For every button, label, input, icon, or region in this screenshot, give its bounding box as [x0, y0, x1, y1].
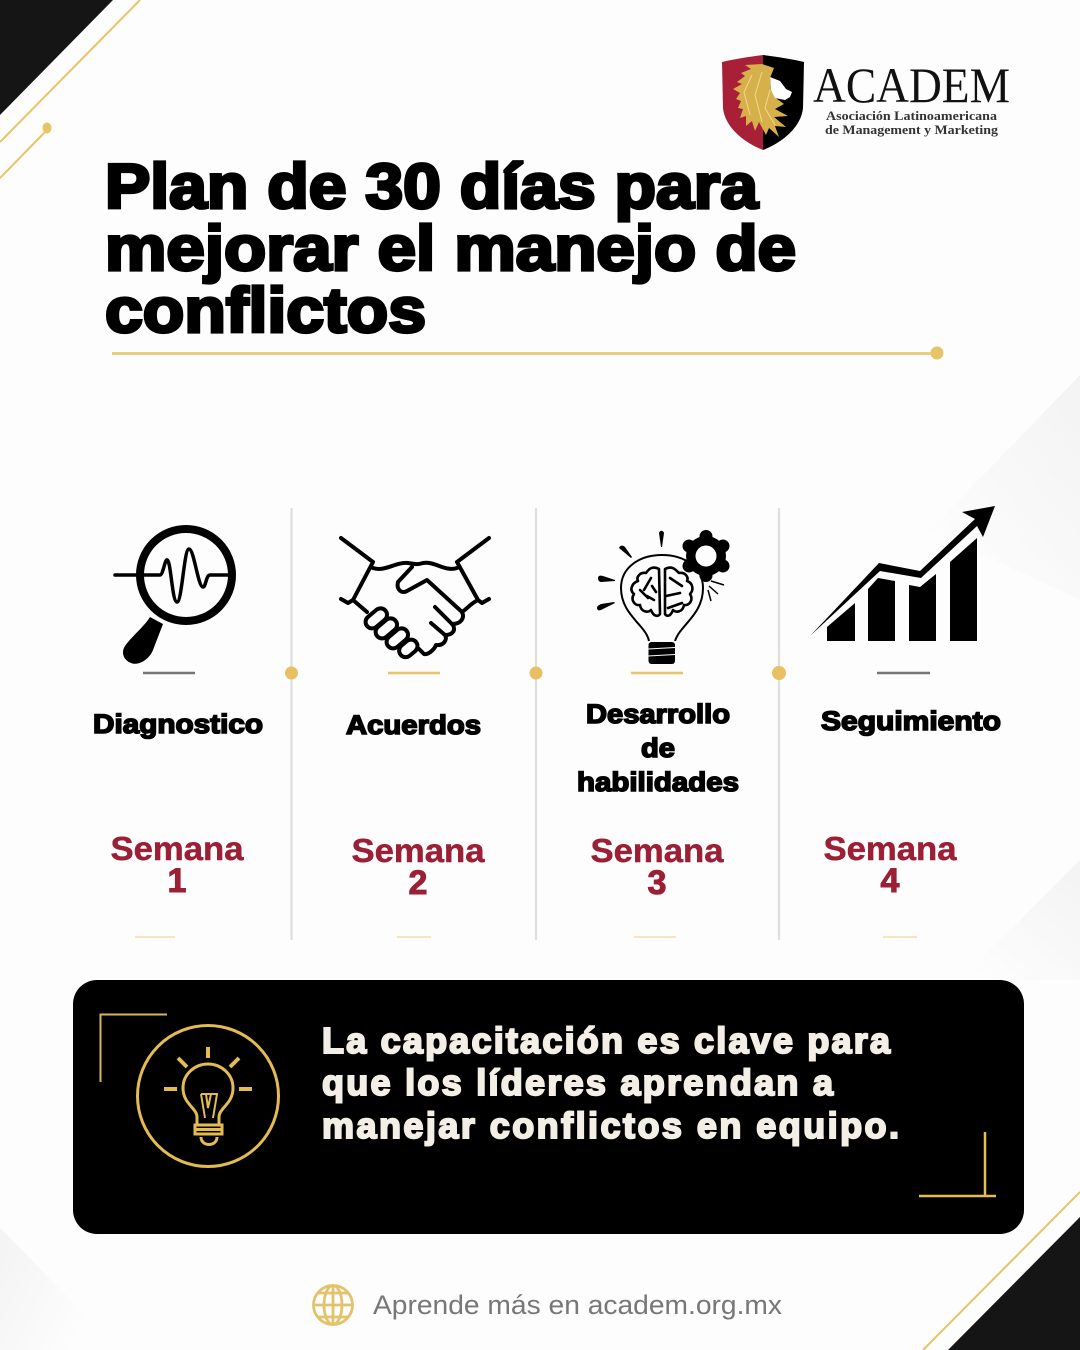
week: 1: [168, 862, 186, 900]
week: Semana: [110, 830, 244, 867]
callout text: que los líderes aprendan a: [322, 1062, 834, 1103]
label: [577, 699, 739, 797]
week: [110, 830, 244, 900]
brand subtitle: de Management y Marketing: [825, 122, 999, 137]
title: [105, 152, 796, 346]
bottom-right corner decoration: [923, 1192, 1080, 1350]
corner bracket: bottom-right: [919, 1132, 996, 1196]
label: habilidades: [577, 767, 739, 797]
brand subtitle: Asociación Latinoamericana: [826, 108, 998, 123]
icon: rising bar chart with arrow: [810, 506, 995, 641]
week: Semana: [824, 830, 957, 867]
week: [590, 832, 724, 902]
label: Seguimiento: [821, 706, 1001, 736]
footer: [314, 1285, 783, 1325]
logo: ACADEM: [722, 55, 1010, 150]
title: Plan de 30 días para: [105, 152, 759, 222]
icon: shield with lion: [722, 55, 804, 150]
week: 4: [881, 862, 900, 900]
week: Semana: [590, 832, 724, 869]
week: Semana: [352, 832, 485, 869]
icon: light bulb in circle: [138, 1026, 278, 1166]
week: [824, 830, 957, 900]
title: conflictos: [105, 276, 426, 346]
column dividers: [285, 508, 786, 940]
label: Acuerdos: [346, 710, 481, 740]
icon: globe: [314, 1285, 352, 1325]
icon: magnifying glass with pulse: [115, 529, 232, 664]
icon: light bulb with brain and gear: [597, 531, 726, 664]
dash: [143, 672, 195, 674]
icon: handshake: [341, 538, 489, 660]
dash: [388, 672, 440, 674]
title: mejorar el manejo de: [105, 214, 796, 284]
footer text: Aprende más en academ.org.mx: [373, 1290, 783, 1320]
dash: [877, 672, 930, 674]
week: 2: [409, 864, 427, 902]
week: [352, 832, 485, 902]
brand subtitle: [825, 108, 999, 137]
column 2: Acuerdos: [341, 538, 489, 937]
label: Diagnostico: [93, 709, 263, 739]
column 3: Desarrollo de habilidades: [577, 531, 739, 937]
title underline: [112, 346, 944, 360]
callout text: manejar conflictos en equipo.: [322, 1105, 899, 1146]
corner bracket: top-left: [100, 1014, 167, 1082]
column 4: Seguimiento: [810, 506, 1001, 937]
label: Desarrollo: [586, 699, 730, 729]
callout text: [322, 1020, 899, 1146]
callout text: La capacitación es clave para: [322, 1020, 891, 1061]
dash: [631, 672, 683, 674]
label: de: [641, 733, 675, 763]
week: 3: [648, 864, 666, 902]
callout panel: [73, 980, 1024, 1234]
brand name: ACADEM: [813, 57, 1010, 113]
top-left corner decoration: [0, 0, 140, 178]
column 1: Diagnostico: [93, 529, 263, 937]
